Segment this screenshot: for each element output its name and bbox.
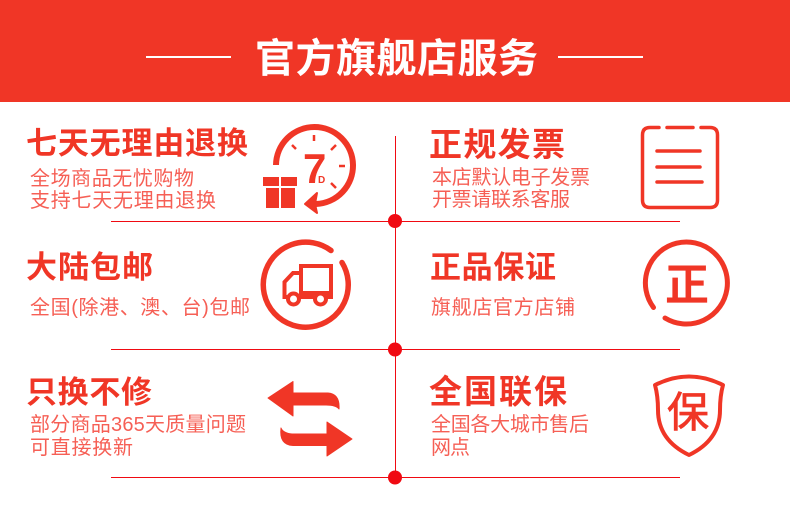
heading: 七天无理由退换 <box>26 126 248 161</box>
panel: nationwide warranty <box>429 373 723 459</box>
description: 本店默认电子发票 <box>432 166 590 189</box>
panel: exchange only <box>26 375 352 459</box>
description: 全场商品无忧购物 <box>30 167 194 190</box>
heading: 正品保证 <box>430 250 556 285</box>
description: 全国各大城市售后 <box>431 413 589 436</box>
panel: nationwide warranty: 网点 <box>431 436 470 459</box>
panel: mainland free shipping <box>26 242 348 327</box>
description: 旗舰店官方店铺 <box>431 296 575 319</box>
icon: warranty shield: 保 <box>667 389 709 436</box>
description: 全国(除港、澳、台)包邮 <box>30 296 250 319</box>
heading: 全国联保 <box>429 373 567 410</box>
icon: 7-day clock and gift: 7 <box>303 145 326 192</box>
panel: official invoice <box>429 126 718 211</box>
icon: delivery truck <box>263 242 348 327</box>
icon: genuine seal: 正 <box>665 261 709 310</box>
grid lines and dots <box>111 136 680 484</box>
heading: 大陆包邮 <box>26 250 153 285</box>
icon: 7-day clock and gift <box>263 127 353 213</box>
panel: genuine guarantee <box>430 242 727 324</box>
icon: warranty shield <box>655 376 723 455</box>
title: 官方旗舰店服务 <box>255 37 538 81</box>
panel: seven-day returns <box>26 126 353 213</box>
icon: exchange arrows <box>268 382 352 456</box>
description: 部分商品365天质量问题 <box>30 413 246 436</box>
panel: official invoice: 开票请联系客服 <box>432 188 570 211</box>
panel: exchange only: 可直接换新 <box>30 436 133 459</box>
icon: 7-day clock and gift: D <box>318 175 325 186</box>
header banner <box>0 0 790 102</box>
heading: 只换不修 <box>26 375 152 410</box>
panel: seven-day returns: 支持七天无理由退换 <box>30 189 216 212</box>
icon: genuine seal <box>645 242 727 324</box>
icon: invoice document <box>642 128 718 208</box>
heading: 正规发票 <box>429 126 565 163</box>
